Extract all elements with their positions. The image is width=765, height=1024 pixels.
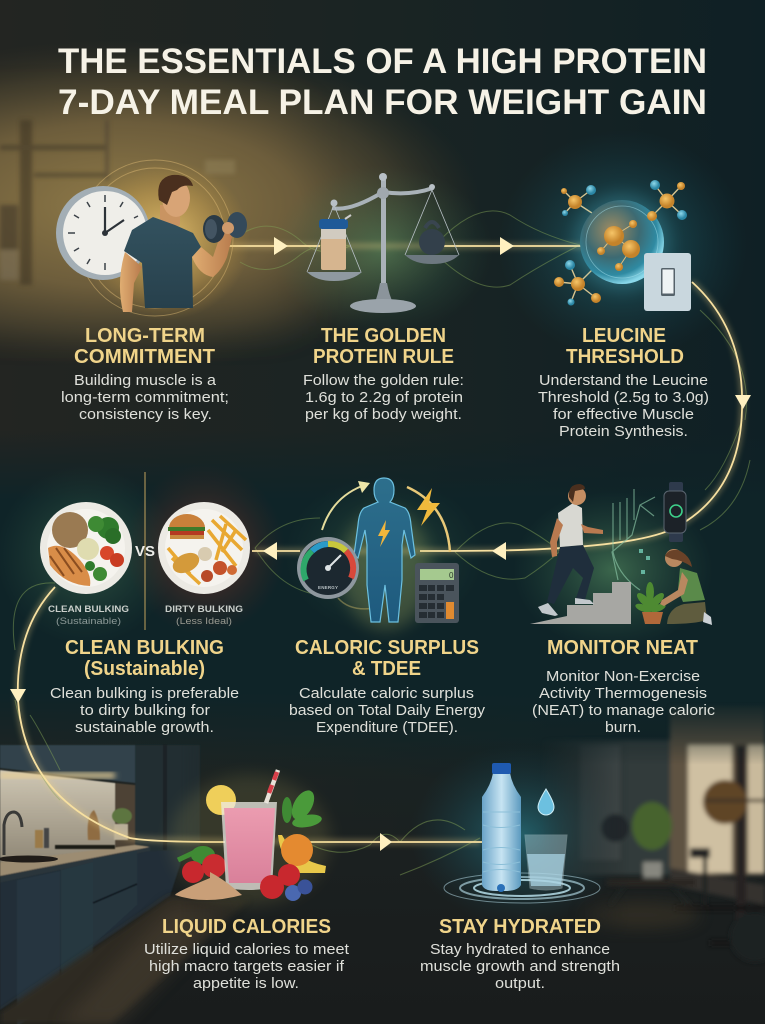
body text: Protein Synthesis. xyxy=(559,423,688,440)
plate caption: clean: (Sustainable) xyxy=(56,616,121,626)
body text: Utilize liquid calories to meet xyxy=(144,941,350,958)
plate caption: dirty: (Less Ideal) xyxy=(176,616,232,626)
body text: Understand the Leucine xyxy=(539,372,708,389)
icon: faucet xyxy=(4,812,22,855)
illustration: runner, stairs, watch, gardener xyxy=(530,482,712,625)
body text xyxy=(144,941,350,992)
body text: based on Total Daily Energy xyxy=(289,702,486,719)
arrow 1 xyxy=(274,237,288,255)
arrow 6 xyxy=(10,689,26,703)
heading: CALORIC SURPLUS xyxy=(295,636,479,659)
panel: caloric surplus and tdee xyxy=(289,478,486,736)
plate caption: dirty: DIRTY BULKING xyxy=(165,604,243,614)
illustration: smoothie and fruit xyxy=(170,770,330,905)
arrow 7 xyxy=(380,833,392,851)
panel: long-term commitment xyxy=(56,160,250,423)
heading: (Sustainable) xyxy=(84,657,205,680)
panel: stay hydrated xyxy=(420,763,620,992)
body text: muscle growth and strength xyxy=(420,958,620,975)
title xyxy=(58,42,707,122)
heading: COMMITMENT xyxy=(74,345,215,368)
body text: long-term commitment; xyxy=(61,389,229,406)
panel: liquid calories xyxy=(144,770,350,992)
body text: to dirty bulking for xyxy=(80,702,210,719)
title: 7-DAY MEAL PLAN FOR WEIGHT GAIN xyxy=(58,83,707,122)
heading: THRESHOLD xyxy=(566,345,684,368)
body text: appetite is low. xyxy=(193,975,299,992)
heading: STAY HYDRATED xyxy=(439,915,601,938)
body text: Monitor Non-Exercise xyxy=(546,668,700,685)
body text: consistency is key. xyxy=(79,406,212,423)
heading: MONITOR NEAT xyxy=(547,636,698,659)
heading: LONG-TERM xyxy=(85,324,205,347)
body text: Clean bulking is preferable xyxy=(50,685,239,702)
body text: Calculate caloric surplus xyxy=(299,685,474,702)
icon: balance scale xyxy=(307,173,459,313)
body text xyxy=(538,372,709,440)
body text xyxy=(61,372,229,423)
flow path xyxy=(10,211,751,875)
illustration: body, gauge, calculator: ENERGY xyxy=(318,585,338,590)
illustration: body, gauge, calculator: 0 xyxy=(449,571,454,580)
body text: (NEAT) to manage caloric xyxy=(532,702,716,719)
body text xyxy=(289,685,486,736)
kitchen backdrop xyxy=(0,745,250,1024)
body text xyxy=(532,668,716,736)
illustration: body, gauge, calculator xyxy=(297,478,459,630)
heading: PROTEIN RULE xyxy=(313,345,454,368)
plate caption: clean xyxy=(48,604,129,626)
body text: Stay hydrated to enhance xyxy=(430,941,610,958)
panel: leucine threshold xyxy=(538,180,709,440)
body text: high macro targets easier if xyxy=(149,958,345,975)
panel: clean bulking xyxy=(40,472,250,736)
gym backdrop xyxy=(566,708,765,946)
arrow 5 xyxy=(263,542,277,560)
body text: Threshold (2.5g to 3.0g) xyxy=(538,389,709,406)
heading: CLEAN BULKING xyxy=(65,636,224,659)
illustration: water bottle, glass, ripples xyxy=(444,763,600,903)
heading xyxy=(566,324,684,368)
body text: for effective Muscle xyxy=(553,406,694,423)
title: THE ESSENTIALS OF A HIGH PROTEIN xyxy=(58,42,707,81)
plate caption: dirty xyxy=(165,604,243,626)
icon: clean plate xyxy=(40,502,132,594)
arrow 4 xyxy=(492,542,506,560)
heading xyxy=(65,636,224,680)
body text xyxy=(50,685,239,736)
body text: Building muscle is a xyxy=(74,372,217,389)
body text xyxy=(420,941,620,992)
vs label: VS xyxy=(135,543,155,560)
icon: dirty plate xyxy=(158,502,250,594)
heading: LEUCINE xyxy=(582,324,666,347)
body text: output. xyxy=(495,975,545,992)
icon: molecules, cell and switch xyxy=(554,180,691,311)
body text: sustainable growth. xyxy=(75,719,214,736)
panel: golden protein rule xyxy=(303,173,464,423)
heading: THE GOLDEN xyxy=(321,324,446,347)
heading xyxy=(295,636,479,680)
body text xyxy=(303,372,464,423)
illustration: clock and man with dumbbell xyxy=(56,160,250,320)
body text: burn. xyxy=(605,719,641,736)
panel: monitor neat xyxy=(530,482,716,736)
body text: per kg of body weight. xyxy=(305,406,462,423)
body text: 1.6g to 2.2g of protein xyxy=(305,389,463,406)
plate caption: clean: CLEAN BULKING xyxy=(48,604,129,614)
arrow 3 xyxy=(735,395,751,409)
body text: Follow the golden rule: xyxy=(303,372,464,389)
heading: & TDEE xyxy=(352,657,421,680)
arrow 2 xyxy=(500,237,514,255)
heading: LIQUID CALORIES xyxy=(162,915,331,938)
heading xyxy=(313,324,454,368)
heading xyxy=(74,324,215,368)
body text: Activity Thermogenesis xyxy=(539,685,707,702)
body text: Expenditure (TDEE). xyxy=(316,719,458,736)
